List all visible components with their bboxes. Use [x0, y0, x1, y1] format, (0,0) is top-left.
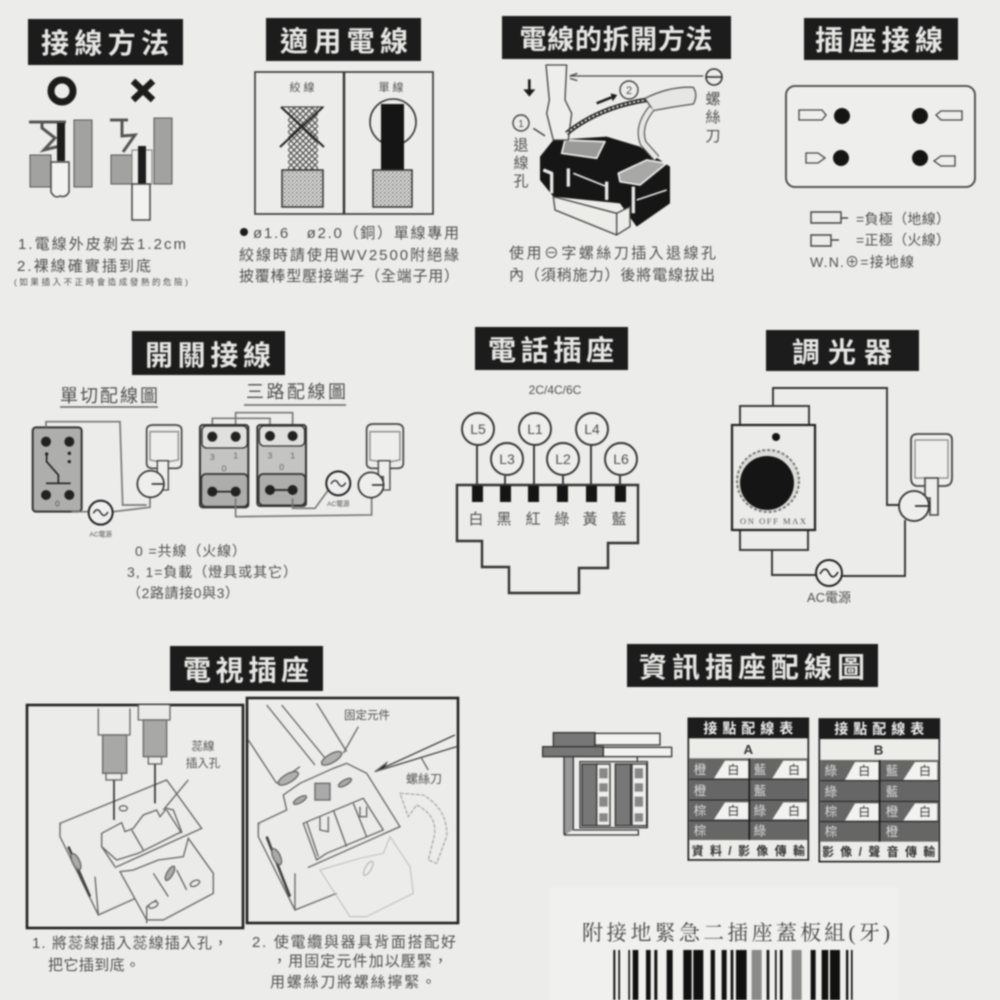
- diagram: contacts and line labels: L3: [499, 451, 515, 467]
- table: wiring table B: B: [874, 743, 884, 758]
- diagram: three way wiring: 3: [210, 452, 215, 462]
- text: wire specs: ø1.6 ø2.0（銅）單線專用: [253, 225, 459, 242]
- icon: lamp: [899, 434, 952, 521]
- diagram: dimmer wiring: [740, 388, 905, 576]
- diagram: contacts and line labels: L4: [584, 421, 600, 437]
- table: wiring table B: 綠: [825, 785, 838, 799]
- frame: step panels: [27, 698, 458, 928]
- table: wiring table B: 白: [858, 763, 870, 778]
- heading: wire removal: 電線的拆開方法: [520, 24, 712, 55]
- diagram: stranded wire rejected: [280, 80, 324, 207]
- heading: suitable wires: 適用電線: [280, 26, 408, 57]
- label: core insertion hole: 插入孔: [186, 756, 221, 770]
- text: removal instructions: 使用⊖字螺絲刀插入退線孔: [509, 245, 716, 262]
- diagram: contacts and line labels: 藍: [611, 511, 627, 528]
- heading: telephone socket: [475, 327, 628, 370]
- table: wiring table A: 藍: [754, 763, 767, 777]
- panel: socket wiring: [786, 18, 975, 270]
- diagram: three way wiring: 3: [268, 450, 273, 460]
- table: wiring table B: 棕: [825, 805, 838, 819]
- heading: wiring method: 接線方法: [41, 28, 169, 59]
- panel: dimmer: [732, 330, 952, 605]
- table: wiring table B: 藍: [886, 764, 899, 778]
- background: product label: [550, 888, 898, 1000]
- diagram: contacts and line labels: L2: [555, 451, 571, 467]
- table: wiring table B: 白: [858, 804, 870, 819]
- icon: wrong cross: [133, 81, 153, 100]
- diagram: three way wiring: AC電源: [327, 499, 350, 508]
- label: step 1 release hole: 孔: [513, 173, 529, 190]
- text: TV socket steps: ，用固定元件加以壓緊，: [272, 953, 448, 970]
- table: wiring table A: A: [743, 742, 753, 757]
- table: wiring table B: 橙: [886, 825, 899, 839]
- diagram: single pole wiring: AC電源: [89, 530, 112, 539]
- table: wiring table A: 白: [788, 762, 800, 777]
- label: step 2: [620, 81, 638, 99]
- diagram: contacts and line labels: 黃: [582, 511, 598, 528]
- panel: wire removal: [502, 16, 731, 284]
- panel: suitable wires: [239, 18, 459, 285]
- label: step 1 release hole: 退: [513, 137, 529, 154]
- text: wiring notes: (如果插入不正時會造成發熱的危險): [14, 277, 188, 287]
- panel: wiring method: [14, 19, 188, 287]
- label: core insertion hole: [186, 739, 221, 770]
- legend: socket poles: W.N.⊕=接地線: [810, 254, 914, 270]
- panel: product label and barcode: [550, 888, 898, 1000]
- legend: socket poles: =負極（地線）: [856, 211, 950, 227]
- table: wiring table B: 接點配線表: [834, 721, 924, 737]
- table: wiring table A: [688, 718, 808, 860]
- label: minus screwdriver symbol and name: [705, 69, 722, 145]
- text: TV socket steps: 2. 使電纜與器具背面搭配好: [252, 934, 456, 951]
- text: wire specs: [239, 225, 459, 285]
- diagram: modular jack outline: [457, 485, 638, 593]
- diagram: three way wiring: 0: [222, 464, 227, 474]
- diagram: contacts and line labels: 紅: [525, 511, 541, 528]
- panel: telephone socket: [457, 327, 638, 593]
- heading: TV socket: 電視插座: [183, 655, 309, 686]
- diagram: wrong wire insertion: [110, 118, 172, 220]
- diagram: step 1 insert core: [60, 705, 213, 923]
- text: switch terminal notes: （2路請接0與3）: [127, 585, 239, 601]
- table: wiring table B: 影像/聲音傳輸: [822, 844, 935, 859]
- panel: data socket wiring: [543, 644, 939, 862]
- table: wiring table A: 橙: [694, 784, 707, 798]
- label: minus screwdriver symbol and name: 刀: [705, 128, 721, 145]
- labels: fixing part and screwdriver: [344, 708, 442, 786]
- table: wiring table B: 白: [919, 763, 931, 778]
- table: wiring table B: 棕: [825, 825, 838, 839]
- heading: TV socket: [170, 646, 323, 691]
- frame: wire comparison: [255, 72, 433, 214]
- text: TV socket steps: [32, 934, 456, 991]
- text: TV socket steps: 1. 將蕊線插入蕊線插入孔，: [32, 935, 228, 952]
- table: wiring table A: 橙: [694, 763, 707, 777]
- text: product name: 附接地緊急二插座蓋板組(牙): [582, 921, 890, 945]
- icon: AC source: [807, 560, 851, 605]
- heading: telephone socket: 電話插座: [488, 335, 614, 366]
- heading: dimmer: [766, 330, 919, 371]
- diagram: correct wire insertion: [29, 120, 92, 197]
- panel: switch wiring: [33, 331, 403, 601]
- text: TV socket steps: 把它插到底。: [48, 956, 140, 974]
- table: wiring table A: 棕: [694, 804, 707, 818]
- label: step 2: 2: [626, 85, 632, 97]
- text: wiring notes: 2.裸線確實插到底: [17, 257, 151, 275]
- text: wire specs: 絞線時請使用WV2500附絕緣: [239, 246, 459, 264]
- diagram: three way wiring: 1: [233, 450, 238, 460]
- labels: fixing part and screwdriver: 螺絲刀: [406, 771, 442, 786]
- diagram: contacts and line labels: 黑: [496, 511, 512, 528]
- diagram: solid wire accepted: 單 線: [378, 80, 404, 94]
- heading: socket wiring: [804, 18, 958, 60]
- labels: fixing part and screwdriver: 固定元件: [344, 708, 390, 722]
- label: minus screwdriver symbol and name: 絲: [705, 109, 721, 126]
- diagram: solid wire accepted: [370, 80, 416, 207]
- legend: socket poles: =正極（火線）: [856, 232, 950, 248]
- table: wiring table A: 綠: [754, 804, 767, 818]
- icon: correct ring: [51, 80, 73, 102]
- diagram: data socket section: [543, 733, 672, 835]
- diagram: contacts and line labels: [462, 413, 637, 528]
- diagram: contacts and line labels: 綠: [554, 511, 570, 528]
- text: removal instructions: 內（須稍施力）後將電線拔出: [509, 267, 715, 284]
- diagram: three way wiring: 1: [290, 450, 295, 460]
- table: wiring table A: 白: [727, 803, 739, 818]
- diagram: single pole wiring: [33, 422, 182, 539]
- table: wiring table A: 資料/影像傳輸: [692, 843, 805, 858]
- subheading: single pole: 單切配線圖: [60, 386, 158, 406]
- table: wiring table B: 綠: [825, 764, 838, 778]
- icon: AC source: AC電源: [807, 590, 851, 605]
- text: removal instructions: [509, 245, 716, 284]
- text: switch terminal notes: 3, 1=負載（燈具或其它）: [127, 564, 297, 580]
- diagram: step 2 fix and tighten: [248, 703, 457, 917]
- diagram: dimmer plate and knob: [732, 425, 815, 530]
- diagram: contacts and line labels: 白: [468, 511, 484, 528]
- table: wiring table A: 藍: [754, 784, 767, 798]
- panel: TV socket: [27, 646, 458, 991]
- heading: data socket wiring: [627, 644, 878, 687]
- barcode: [613, 950, 853, 1000]
- diagram: three way wiring: 0: [279, 462, 284, 472]
- table: wiring table A: 接點配線表: [703, 720, 793, 736]
- heading: dimmer: 調光器: [792, 337, 892, 368]
- label: connector types: 2C/4C/6C: [529, 383, 582, 397]
- heading: switch wiring: [132, 331, 285, 375]
- text: wire specs: 披覆棒型壓接端子（全端子用）: [239, 268, 459, 285]
- diagram: contacts and line labels: L5: [470, 421, 486, 437]
- heading: suitable wires: [266, 18, 421, 61]
- text: switch terminal notes: [127, 543, 297, 601]
- heading: data socket wiring: 資訊插座配線圖: [639, 652, 865, 683]
- diagram: contacts and line labels: L1: [527, 421, 543, 437]
- table: wiring table A: 綠: [754, 824, 767, 838]
- diagram: stranded wire rejected: 絞 線: [289, 80, 315, 94]
- diagram: socket plate: [786, 86, 975, 187]
- table: wiring table A: 白: [788, 803, 800, 818]
- label: step 1 release hole: 線: [513, 155, 529, 172]
- label: step 1 release hole: 1: [518, 119, 524, 130]
- text: wiring notes: 1.電線外皮剝去1.2cm: [18, 236, 186, 253]
- heading: wiring method: [28, 19, 183, 65]
- label: step 1 release hole: [513, 115, 529, 190]
- table: wiring table A: 白: [727, 762, 739, 777]
- diagram: switch with screwdriver: [523, 65, 703, 235]
- diagram: three way wiring: [200, 413, 403, 517]
- heading: wire removal: [502, 16, 731, 59]
- table: wiring table B: 藍: [886, 785, 899, 799]
- table: wiring table B: 白: [919, 804, 931, 819]
- text: TV socket steps: 用螺絲刀將螺絲擰緊。: [270, 974, 436, 991]
- heading: socket wiring: 插座接線: [815, 25, 943, 56]
- subheading: three way: 三路配線圖: [246, 382, 346, 402]
- table: wiring table A: 棕: [694, 824, 707, 838]
- label: minus screwdriver symbol and name: 螺: [705, 91, 721, 108]
- diagram: dimmer plate and knob: ON OFF MAX: [740, 516, 806, 526]
- diagram: contacts and line labels: L6: [613, 451, 629, 467]
- diagram: single pole wiring: 0: [55, 500, 60, 509]
- label: core insertion hole: 蕊線: [192, 739, 215, 753]
- table: wiring table B: 橙: [886, 805, 899, 819]
- heading: switch wiring: 開關接線: [145, 340, 271, 371]
- text: wiring notes: [14, 236, 188, 287]
- text: switch terminal notes: 0 =共線（火線）: [135, 543, 246, 559]
- legend: socket poles: [810, 211, 950, 270]
- table: wiring table B: [819, 719, 939, 862]
